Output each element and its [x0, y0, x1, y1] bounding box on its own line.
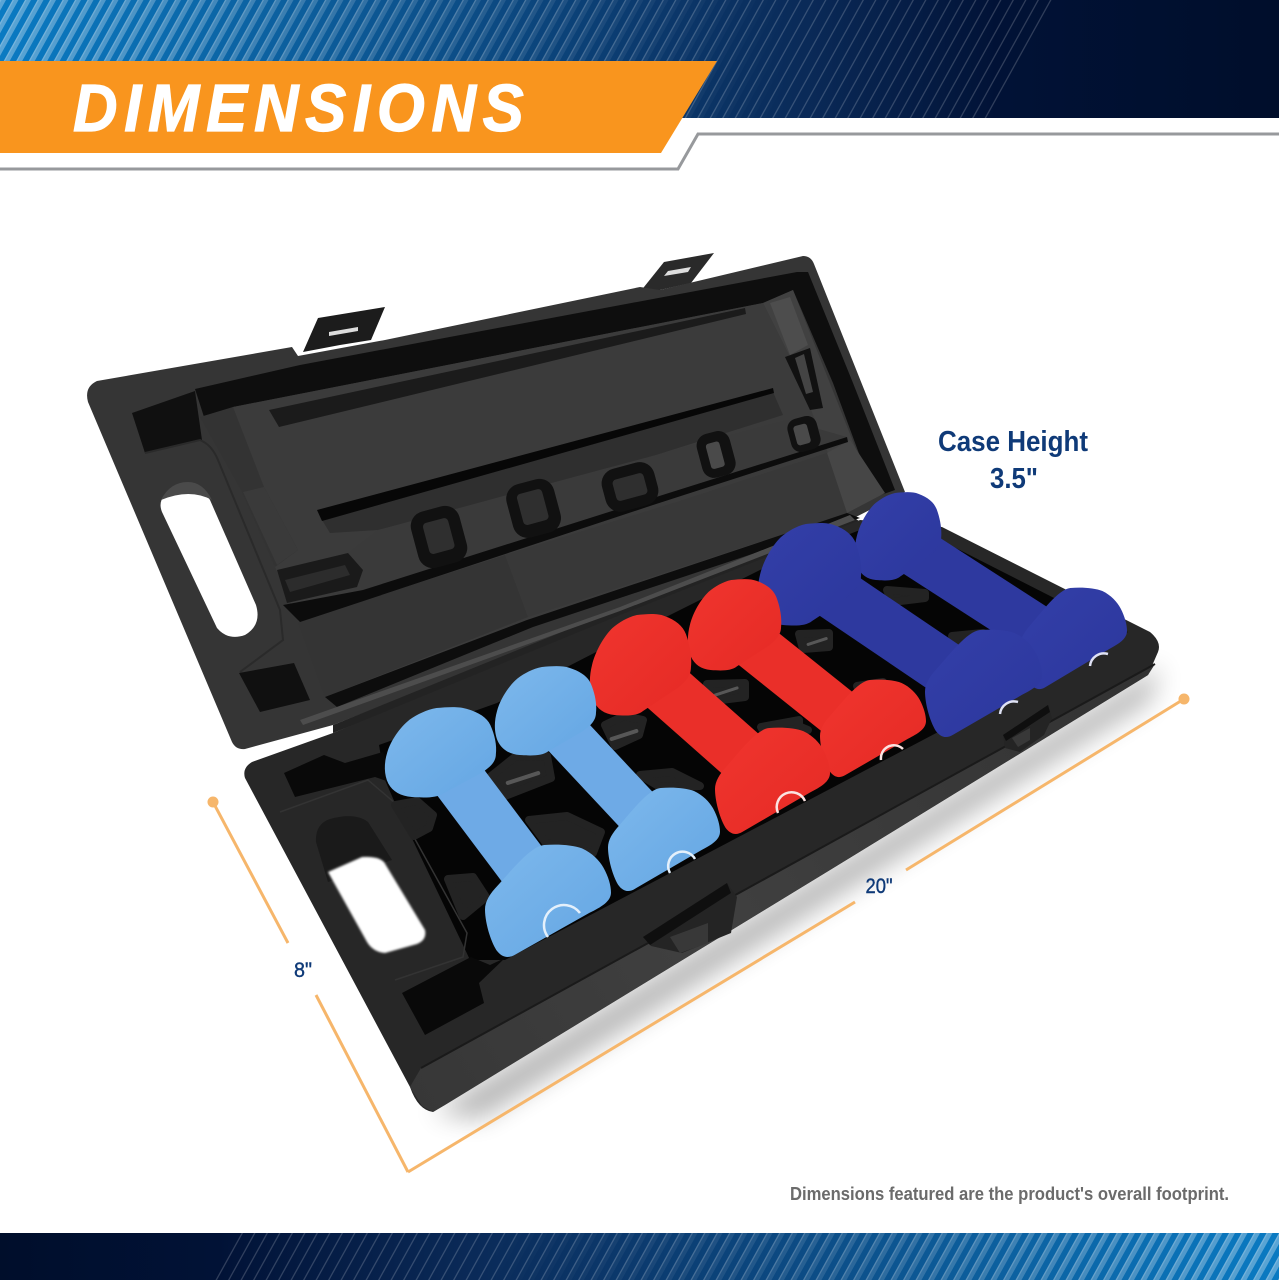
lid floor: [233, 303, 847, 697]
lid edge highlight: [300, 515, 855, 725]
lower panels: [298, 555, 528, 697]
dimension line: 20 inch: [408, 694, 1190, 1172]
title: DIMENSIONS: [73, 71, 524, 146]
dumbbell: navy left: [758, 523, 1042, 737]
label: case height: Case Height: [938, 426, 1088, 458]
tray latch right: [1003, 705, 1052, 752]
tray shell: [244, 520, 1159, 1112]
tray recess top left: [284, 752, 398, 797]
product: dumbbell case: [87, 253, 1160, 1118]
lid latch right: [640, 253, 714, 292]
tray latch centre: [643, 883, 737, 953]
lid handle hole: [161, 488, 258, 637]
case lid: [87, 253, 905, 749]
case shadow: [433, 665, 1160, 1118]
dimension line: 8 inch: [208, 796, 408, 1172]
label: case height: [938, 426, 1088, 495]
lid locator blocks: [407, 414, 823, 571]
case tray: [244, 520, 1159, 1112]
lid recess top left: [132, 391, 202, 453]
black iron dumbbell heads: [395, 590, 983, 916]
title banner: [0, 61, 717, 153]
lid left pillar: [200, 407, 298, 567]
black line below blocks band: [283, 437, 848, 622]
middle slot ledge: [322, 392, 783, 533]
tray handle rim line: [280, 780, 467, 980]
lid recess bottom left: [239, 663, 310, 712]
tray handle hole: [328, 857, 425, 953]
dumbbell: navy right: [855, 492, 1127, 689]
label: 8 inch: 8": [294, 959, 312, 982]
tray handle recess: [316, 816, 392, 882]
top slot: [269, 308, 746, 427]
long bar: [277, 553, 363, 603]
lid latch left: [303, 307, 385, 352]
tray rim seam: [421, 664, 1155, 1068]
footer band: [0, 1233, 1279, 1280]
upper and right inner wall channel: [195, 272, 895, 497]
footnote: Dimensions featured are the product's overall footprint.: [790, 1184, 1229, 1204]
header rule line: [0, 134, 1279, 169]
header band: [0, 0, 1279, 118]
right wall highlight: [770, 297, 808, 355]
lower right panel: [827, 440, 885, 513]
lid shell: [87, 256, 905, 749]
dumbbell: red right: [688, 579, 926, 777]
middle slot: [317, 388, 774, 521]
dumbbell: light blue right: [495, 666, 720, 891]
dumbbell: light blue left: [385, 707, 611, 957]
lid floor front gap: [325, 513, 860, 707]
right slot: [785, 348, 823, 410]
lid handle rim line: [145, 440, 283, 672]
right inner wall: [763, 290, 875, 513]
dumbbell: red left: [590, 614, 830, 834]
tray inner black: [379, 530, 1128, 960]
label: 20 inch: 20": [866, 875, 892, 898]
label: case height: 3.5": [990, 463, 1038, 495]
tray recess bottom left: [402, 957, 505, 1035]
blocks band: [348, 420, 847, 592]
tray front face: [410, 664, 1155, 1112]
lid to tray hinge backing: [333, 515, 865, 733]
